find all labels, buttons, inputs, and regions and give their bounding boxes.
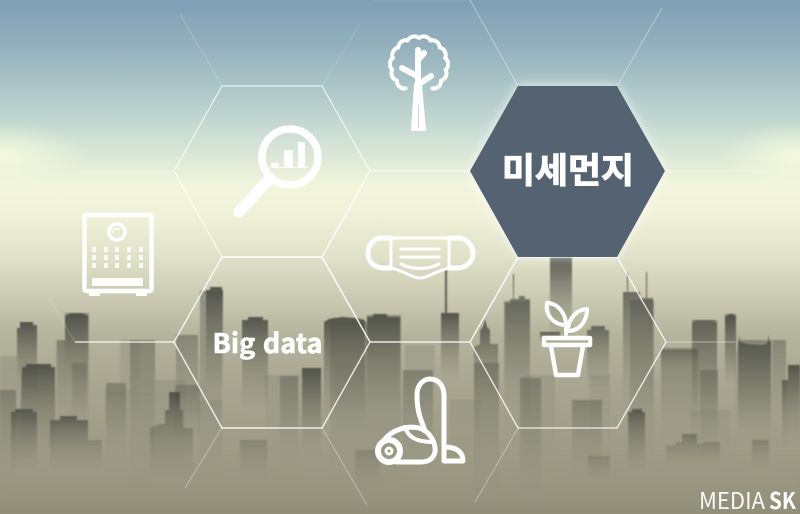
city skyline silhouette bbox=[0, 257, 800, 514]
dark hexagon: 미세먼지 bbox=[470, 86, 665, 257]
icon: face mask bbox=[368, 238, 473, 278]
icon: potted plant bbox=[544, 303, 590, 375]
icon: magnifying glass with bar chart bbox=[239, 129, 318, 212]
light glow on horizon bbox=[0, 123, 800, 187]
icon: air purifier bbox=[84, 215, 152, 296]
icon: tree bbox=[390, 36, 448, 130]
Big data label: Big data bbox=[212, 322, 322, 361]
icon: vacuum cleaner bbox=[378, 379, 463, 462]
dark hexagon: 미세먼지: 미세먼지 bbox=[502, 143, 634, 194]
